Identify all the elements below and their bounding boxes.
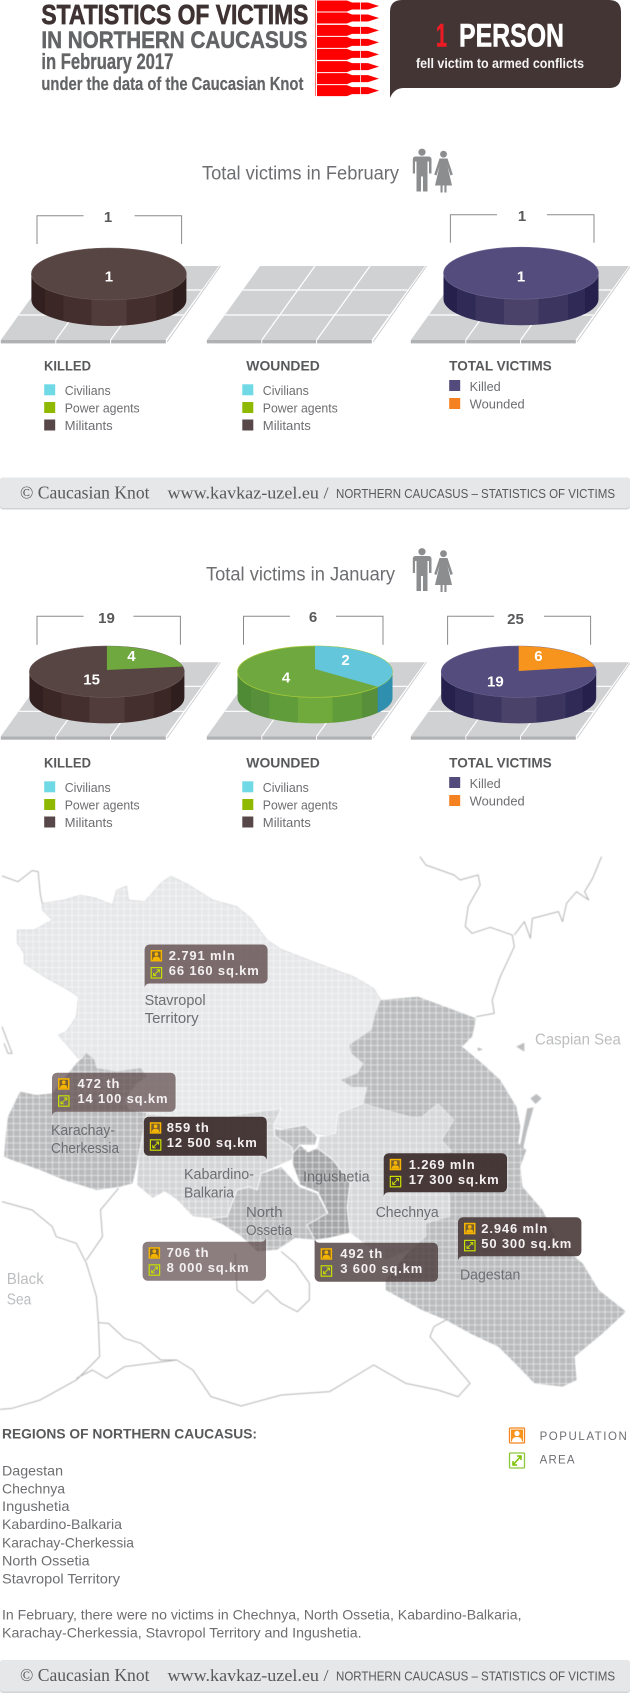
Kabardino-Balkaria region [137, 1108, 305, 1218]
label: Stavropol Territory: Territory [145, 1010, 199, 1027]
chart: total victims in February: 1 [518, 208, 526, 225]
callout: Karachay-Cherkessia stats: 472 th [78, 1076, 120, 1091]
legend: wounded (January): Power agents [263, 798, 338, 812]
chart: total victims in February [411, 208, 630, 343]
label: Stavropol Territory: Stavropol [145, 992, 206, 1009]
chart: total victims in February: 1 [517, 268, 525, 286]
label: Stavropol Territory [145, 992, 206, 1027]
callout: Dagestan stats [458, 1217, 581, 1260]
callout: Ingushetia stats: 492 th [340, 1246, 382, 1261]
footer bar: source (top): NORTHERN CAUCASUS – STATISTICS OF VICTIMS [336, 487, 615, 501]
Chechnya region [317, 1103, 454, 1260]
callout: 1 person: PERSON [459, 18, 564, 54]
legend: total victims (February): Killed [470, 380, 501, 394]
footer bar: source (bottom): © Caucasian Knot [20, 1665, 150, 1685]
chart: killed in February: 1 [105, 268, 113, 286]
legend: killed (January): Power agents [65, 798, 140, 812]
chart: killed in February [1, 209, 220, 343]
icon: population [510, 1428, 524, 1443]
legend: killed (January): Civilians [65, 781, 111, 795]
callout: Kabardino-Balkaria stats: 12 500 sq.km [167, 1135, 257, 1150]
callout: Karachay-Cherkessia stats: 14 100 sq.km [78, 1091, 168, 1106]
legend: wounded (January): Militants [263, 816, 311, 830]
label: Black Sea: Black [7, 1271, 45, 1288]
heading: total victims in January: Total victims in January [206, 564, 395, 586]
callout: Kabardino-Balkaria stats [144, 1117, 267, 1160]
legend: total victims (February) [449, 358, 552, 412]
North Ossetia region [209, 1125, 327, 1252]
map legend [510, 1428, 627, 1468]
callout: Dagestan stats: 2.946 mln [481, 1221, 547, 1236]
legend: killed (January) [44, 756, 140, 830]
title line 3: in February 2017 [41, 49, 173, 74]
callout: Chechnya stats: 1.269 mln [409, 1157, 475, 1172]
map legend: AREA [540, 1454, 575, 1466]
title line 2: IN NORTHERN CAUCASUS [41, 27, 307, 54]
label: North Ossetia [246, 1204, 293, 1239]
label: Kabardino-Balkaria: Kabardino- [184, 1166, 254, 1183]
label: Ingushetia: Ingushetia [303, 1168, 370, 1186]
list of regions: Chechnya [2, 1480, 65, 1496]
callout: 1 person [390, 0, 621, 98]
label: Karachay-Cherkessia: Cherkessia [51, 1140, 120, 1157]
footer bar: source (top): © Caucasian Knot [20, 482, 150, 502]
legend: wounded (February): Civilians [263, 384, 309, 398]
callout: North Ossetia stats: 706 th [167, 1245, 209, 1260]
label: Black Sea [7, 1271, 45, 1308]
callout: 1 person: 1 [436, 18, 447, 54]
header title block [41, 0, 308, 94]
legend: wounded (January): WOUNDED [246, 756, 320, 770]
list of regions: North Ossetia [2, 1552, 90, 1568]
callout: Chechnya stats: 17 300 sq.km [409, 1172, 499, 1187]
list of regions [2, 1462, 134, 1586]
legend: wounded (February) [242, 358, 338, 433]
chart: wounded in January: 6 [309, 609, 317, 626]
callout: North Ossetia stats [143, 1238, 266, 1281]
list of regions: Ingushetia [2, 1498, 70, 1514]
legend: wounded (January) [242, 756, 338, 830]
label: Caspian Sea: Caspian Sea [535, 1032, 621, 1048]
callout: Ingushetia stats: 3 600 sq.km [340, 1261, 422, 1276]
label: Karachay-Cherkessia [51, 1122, 120, 1157]
legend: total victims (February): TOTAL VICTIMS [449, 358, 552, 374]
legend: killed (January): KILLED [44, 756, 91, 770]
title line 4: under the data of the Caucasian Knot [41, 73, 303, 94]
legend: killed (February): Militants [65, 419, 113, 433]
icon: man and woman (February) [413, 149, 453, 192]
note paragraph [2, 1606, 522, 1640]
chart: killed in February: 1 [104, 209, 112, 226]
heading: regions of Northern Caucasus: REGIONS OF NORTHERN CAUCASUS: [2, 1426, 257, 1442]
legend: killed (February): KILLED [44, 358, 91, 374]
chart: killed in January [1, 610, 220, 740]
legend: total victims (January): TOTAL VICTIMS [449, 756, 552, 770]
list of regions: Dagestan [2, 1462, 63, 1478]
Dagestan region [342, 997, 626, 1387]
legend: wounded (January): Civilians [263, 781, 309, 795]
footer bar: source (bottom) [0, 1660, 630, 1693]
legend: killed (January): Militants [65, 816, 113, 830]
list of regions: Karachay-Cherkessia [2, 1534, 134, 1550]
label: North Ossetia: Ossetia [246, 1222, 293, 1239]
legend: wounded (February): Power agents [263, 402, 338, 416]
callout: Ingushetia stats [315, 1239, 438, 1282]
empty platform: wounded in February [207, 266, 426, 343]
footer bar: source (top) [0, 478, 630, 510]
callout: Kabardino-Balkaria stats: 859 th [167, 1120, 209, 1135]
legend: wounded (February): WOUNDED [246, 358, 320, 374]
footer bar: source (bottom): www.kavkaz-uzel.eu / [168, 1666, 329, 1685]
list of regions: Stavropol Territory [2, 1570, 120, 1586]
chart: wounded in January: 4 [282, 670, 291, 686]
chart: total victims in January [411, 611, 630, 740]
chart: killed in January: 4 [127, 648, 136, 665]
map legend: POPULATION [540, 1431, 627, 1443]
label: North Ossetia: North [246, 1204, 282, 1221]
legend: total victims (January): Wounded [470, 794, 525, 808]
callout: Dagestan stats: 50 300 sq.km [481, 1236, 571, 1251]
chart: wounded in January: 2 [341, 652, 350, 669]
callout: Stavropol Territory stats: 2.791 mln [169, 948, 235, 963]
callout: Stavropol Territory stats: 66 160 sq.km [169, 963, 259, 978]
label: Black Sea: Sea [7, 1292, 31, 1308]
label: Chechnya: Chechnya [376, 1204, 439, 1221]
label: Kabardino-Balkaria [184, 1166, 254, 1202]
chart: total victims in January: 25 [507, 611, 524, 628]
chart: total victims in January: 6 [534, 648, 543, 665]
label: Kabardino-Balkaria: Balkaria [184, 1184, 235, 1202]
callout: Chechnya stats [384, 1153, 507, 1196]
callout: Stavropol Territory stats [145, 944, 268, 988]
legend: total victims (January): Killed [470, 777, 501, 791]
icon: red bullets column [315, 0, 379, 96]
legend: total victims (February): Wounded [470, 398, 525, 412]
callout: Karachay-Cherkessia stats [52, 1073, 176, 1116]
label: Karachay-Cherkessia: Karachay- [51, 1122, 115, 1139]
legend: killed (February): Civilians [65, 384, 111, 398]
Karachay-Cherkessia region [4, 1053, 147, 1190]
legend: killed (February) [44, 358, 140, 433]
callout: North Ossetia stats: 8 000 sq.km [167, 1260, 249, 1275]
note paragraph: In February, there were no victims in Chechnya, North Ossetia, Kabardino-Balkaria, [2, 1606, 522, 1622]
chart: killed in January: 19 [98, 610, 115, 627]
chart: killed in January: 15 [83, 672, 100, 688]
footer bar: source (bottom): NORTHERN CAUCASUS – STATISTICS OF VICTIMS [336, 1670, 615, 1684]
legend: killed (February): Power agents [65, 402, 140, 416]
Caspian islands [477, 1043, 542, 1148]
chart: wounded in January [207, 609, 426, 740]
icon: man and woman (January) [413, 548, 453, 592]
list of regions: Kabardino-Balkaria [2, 1516, 122, 1532]
heading: total victims in February: Total victims in February [202, 164, 399, 184]
label: Dagestan: Dagestan [460, 1266, 520, 1284]
legend: wounded (February): Militants [263, 419, 311, 433]
icon: area [510, 1453, 524, 1468]
note paragraph: Karachay-Cherkessia, Stavropol Territory and Ingushetia. [2, 1624, 362, 1640]
footer bar: source (top): www.kavkaz-uzel.eu / [168, 484, 329, 502]
legend: total victims (January) [449, 756, 552, 808]
callout: 1 person: fell victim to armed conflicts [416, 56, 584, 71]
Ingushetia region [292, 1145, 350, 1240]
chart: total victims in January: 19 [487, 674, 504, 690]
Stavropol Territory region [17, 876, 381, 1135]
map of Northern Caucasus [0, 857, 626, 1409]
